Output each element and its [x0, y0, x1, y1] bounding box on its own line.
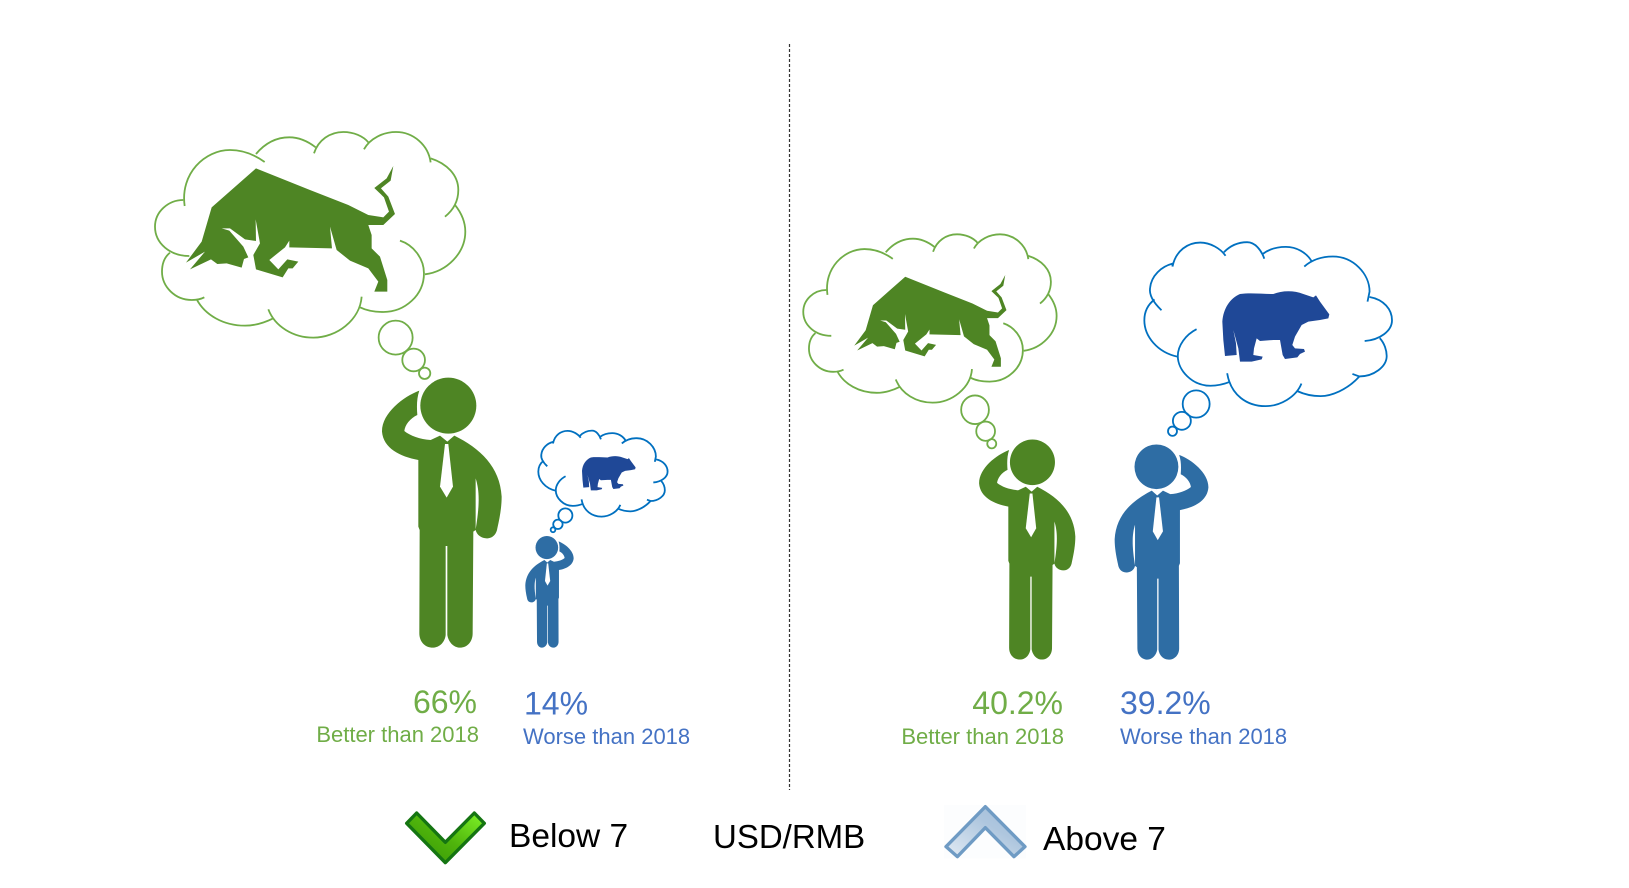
- icon: large green thinking man: [382, 378, 502, 648]
- label: 39.2% worse: 39.2%: [1120, 685, 1211, 721]
- icon: small blue thinking man: [525, 536, 574, 648]
- label: 40.2% better: [901, 685, 1064, 749]
- big thought cloud with bull: [155, 132, 465, 379]
- icon: green thinking man: [979, 439, 1075, 660]
- label: 66% better: Better than 2018: [316, 722, 479, 747]
- label: 14% worse: 14%: [524, 686, 588, 722]
- label: 66% better: [316, 684, 479, 747]
- label: 14% worse: [523, 686, 690, 749]
- panel: left scenario, below 7: [155, 132, 690, 749]
- legend: [407, 805, 1166, 863]
- icon: green down chevron: [407, 813, 484, 863]
- label: 40.2% better: Better than 2018: [901, 724, 1064, 749]
- label: 39.2% worse: [1120, 685, 1287, 749]
- legend label: below 7: Below 7: [509, 818, 628, 855]
- label: 39.2% worse: Worse than 2018: [1120, 724, 1287, 749]
- small thought cloud with bear: [538, 431, 668, 532]
- vertical divider: [788, 44, 790, 790]
- label: 66% better: 66%: [413, 684, 477, 720]
- panel: right scenario, above 7: [803, 234, 1392, 749]
- label: 40.2% better: 40.2%: [972, 685, 1063, 721]
- legend label: above 7: Above 7: [1043, 821, 1166, 858]
- thought cloud with bull: [803, 234, 1057, 448]
- label: 14% worse: Worse than 2018: [523, 724, 690, 749]
- legend label: USD/RMB: USD/RMB: [713, 818, 865, 855]
- icon: blue thinking man: [1115, 444, 1208, 660]
- thought cloud with bear: [1144, 242, 1392, 436]
- icon: blue up chevron: [944, 805, 1026, 858]
